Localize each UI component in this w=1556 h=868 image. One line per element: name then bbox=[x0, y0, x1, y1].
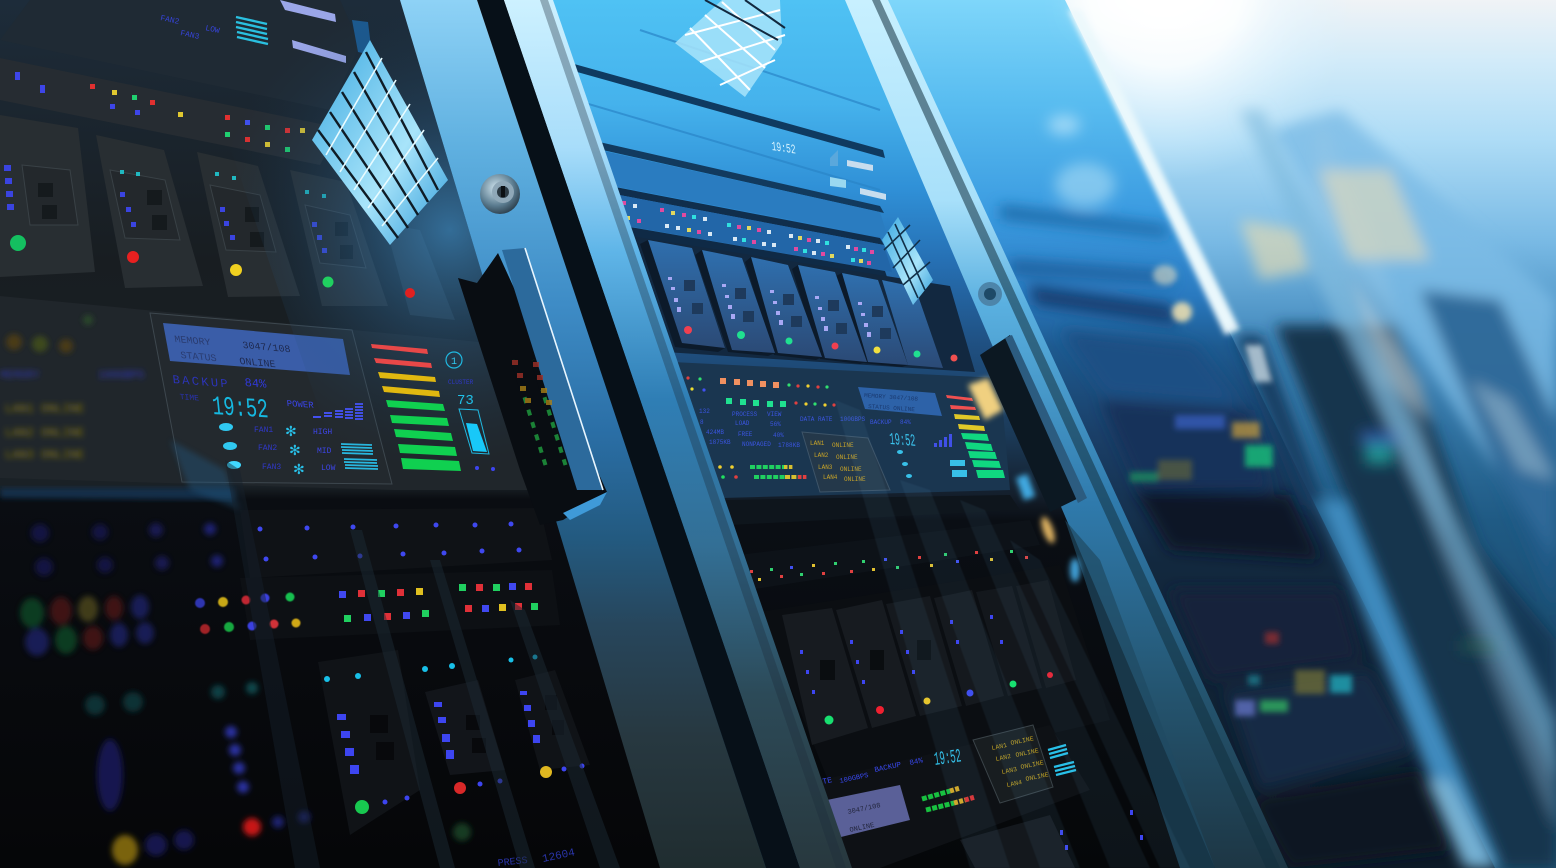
reflected grid: upper left bbox=[312, 40, 448, 245]
panel: left door frame bbox=[398, 0, 852, 868]
fan rows: HIGH bbox=[313, 428, 332, 437]
top readout strip bbox=[0, 0, 372, 110]
bottom display row: 3047/108 bbox=[847, 802, 881, 817]
bottom display row: ONLINE bbox=[1025, 771, 1049, 783]
LAN status box: LAN2 bbox=[814, 452, 829, 459]
panel: second door frame bbox=[838, 0, 1288, 868]
LAN status box: ONLINE bbox=[832, 442, 854, 449]
top rack rows bbox=[567, 30, 975, 372]
process readout text: 40% bbox=[773, 432, 784, 439]
fan rows: FAN1 bbox=[254, 426, 273, 435]
LAN status box: LAN1 bbox=[810, 440, 825, 447]
LAN status box: LAN4 bbox=[823, 474, 838, 481]
fan rows: LOW bbox=[321, 464, 336, 473]
bottom display row: ONLINE bbox=[1010, 735, 1034, 747]
centre clock: 19:52 bbox=[889, 431, 917, 452]
top readout strip: LOW bbox=[204, 24, 221, 36]
LED row strip bbox=[0, 58, 340, 165]
bottom display row: LAN1 bbox=[991, 742, 1008, 752]
memory screen: STATUS ONLINE bbox=[868, 403, 915, 413]
panel: left rack glass bbox=[0, 0, 660, 868]
memory screen: STATUS bbox=[180, 351, 218, 365]
memory screen: 3047/108 bbox=[242, 340, 292, 356]
fan rows: ✻ bbox=[289, 442, 301, 458]
bottom display row: BACKUP bbox=[874, 761, 903, 775]
blurred LED dots bbox=[195, 592, 300, 634]
main display panel: 84% bbox=[244, 376, 268, 392]
main display panel: TIME bbox=[179, 393, 200, 404]
eq bars and fan dashes bbox=[897, 434, 967, 478]
power meter: POWER bbox=[286, 398, 315, 411]
coloured LED rows bbox=[750, 550, 1028, 581]
fan rows: FAN2 bbox=[258, 444, 277, 453]
left blurred readouts: MEMORY bbox=[0, 370, 40, 382]
memory screen bbox=[163, 323, 350, 375]
blurred reflections and rack rows bbox=[1000, 115, 1450, 868]
memory screen: MEMORY bbox=[174, 335, 212, 349]
upper server modules bbox=[0, 115, 455, 320]
reflected grid: mid centre bbox=[882, 217, 933, 305]
process readout text: 56% bbox=[770, 421, 781, 428]
lower dark racks bbox=[725, 495, 1143, 868]
fan rows bbox=[219, 423, 378, 477]
bottom display row: LAN4 bbox=[1006, 779, 1023, 789]
memory screen bbox=[858, 387, 942, 416]
backup text: BACKUP bbox=[172, 373, 228, 391]
process readout text: NONPAGED bbox=[742, 441, 771, 448]
blue tint on upper glass bbox=[180, 0, 580, 600]
bottom display row bbox=[822, 725, 1090, 868]
cluster gauge: CLUSTER bbox=[448, 379, 474, 386]
process readout text: 8 bbox=[700, 419, 704, 426]
top display readout: 19:52 bbox=[771, 139, 796, 158]
bottom display row: 19:52 bbox=[933, 745, 963, 771]
data rate and backup: 84% bbox=[900, 419, 911, 426]
left blurred readouts: LAN3 ONLINE bbox=[5, 448, 84, 462]
warm light flares bbox=[968, 378, 1080, 582]
door lock: left rack bbox=[480, 174, 520, 214]
distant blurred racks bbox=[1240, 110, 1556, 868]
top readout strip: FAN2 bbox=[159, 14, 180, 27]
handle LED reflections bbox=[512, 360, 567, 470]
process readout text: PROCESS bbox=[732, 411, 758, 418]
blurred lights bbox=[1130, 265, 1352, 716]
middle display row bbox=[672, 362, 1010, 498]
reflected grid: top centre bbox=[675, 0, 785, 97]
bottom display row: ONLINE bbox=[849, 822, 875, 835]
lower LED rows bbox=[0, 488, 560, 656]
process readout text: LOAD bbox=[735, 420, 750, 427]
LAN status box: ONLINE bbox=[844, 476, 866, 483]
top-right light flare bbox=[1085, 0, 1245, 30]
small status lights rows bbox=[622, 201, 874, 265]
module status lights bbox=[10, 235, 415, 298]
left blurred readouts bbox=[0, 315, 145, 462]
panel: third blurred rack glass bbox=[885, 0, 1556, 868]
LAN status box: ONLINE bbox=[836, 454, 858, 461]
level meter bars bbox=[371, 344, 461, 471]
process readout text bbox=[699, 408, 800, 449]
LAN status box: ONLINE bbox=[840, 466, 862, 473]
blurred door frames bbox=[1068, 10, 1556, 868]
blue status dots bbox=[258, 522, 522, 562]
row of server modules bbox=[640, 240, 958, 368]
door handle: centre rack bbox=[980, 335, 1087, 512]
bottom display row: 100GBPS bbox=[839, 772, 869, 786]
process readout text: 1788KB bbox=[778, 442, 800, 449]
bottom module lights bbox=[960, 810, 1143, 868]
door lock: centre rack bbox=[978, 282, 1002, 306]
bottom display row: LAN3 bbox=[1001, 766, 1018, 776]
process readout text: 424MB bbox=[706, 429, 724, 436]
sharp LED squares bbox=[339, 583, 538, 622]
data rate and backup: 100GBPS bbox=[840, 416, 866, 423]
lower server modules bbox=[85, 650, 590, 868]
glass reflections in left rack bbox=[170, 440, 620, 868]
memory screen: MEMORY 3047/108 bbox=[864, 392, 919, 403]
process readout text: VIEW bbox=[767, 411, 782, 418]
LAN status box: LAN3 bbox=[818, 464, 833, 471]
cluster gauge bbox=[446, 352, 495, 471]
process readout text: 1875KB bbox=[709, 439, 731, 446]
memory screen: ONLINE bbox=[239, 357, 277, 371]
bottom display row: 84% bbox=[909, 757, 924, 768]
fan rows: FAN3 bbox=[262, 463, 281, 472]
top readout strip: FAN3 bbox=[179, 29, 200, 42]
left blurred readouts: LAN1 ONLINE bbox=[5, 402, 84, 416]
cluster gauge: 1 bbox=[451, 357, 457, 368]
process readout text: 132 bbox=[699, 408, 710, 415]
top display readout bbox=[771, 139, 886, 200]
clock: 19:52 bbox=[211, 392, 270, 426]
glass reflections in centre rack bbox=[835, 400, 1190, 868]
process readout text: FREE bbox=[738, 431, 753, 438]
panel: centre rack glass bbox=[545, 0, 1215, 868]
fan rows: ✻ bbox=[293, 461, 305, 477]
bottom display row: LAN2 bbox=[995, 753, 1012, 763]
centre level meter bbox=[946, 395, 1005, 478]
fan rows: ✻ bbox=[285, 423, 297, 439]
heavily blurred LED dots bbox=[20, 523, 223, 656]
bottom display row: ONLINE bbox=[1015, 747, 1039, 759]
data rate and backup: BACKUP bbox=[870, 419, 892, 426]
cluster gauge: 73 bbox=[457, 393, 474, 409]
blurred lights in distant rack bbox=[1360, 430, 1500, 652]
door handle: left rack bbox=[458, 248, 607, 525]
bottom display row: ONLINE bbox=[1020, 759, 1044, 771]
main display panel bbox=[0, 296, 540, 490]
data rate and backup: DATA RATE bbox=[800, 416, 833, 423]
LAN status box bbox=[802, 432, 890, 492]
left blurred readouts: 100GBPS bbox=[98, 370, 145, 382]
power meter bbox=[286, 398, 363, 419]
left blurred readouts: LAN2 ONLINE bbox=[5, 426, 84, 440]
bottom display row: TE bbox=[822, 776, 833, 787]
data rate and backup bbox=[800, 416, 911, 426]
fan rows: MID bbox=[317, 447, 332, 456]
lower server modules bbox=[782, 580, 1076, 745]
small led bars bbox=[718, 465, 807, 479]
lower server modules: 12604 bbox=[541, 847, 577, 866]
